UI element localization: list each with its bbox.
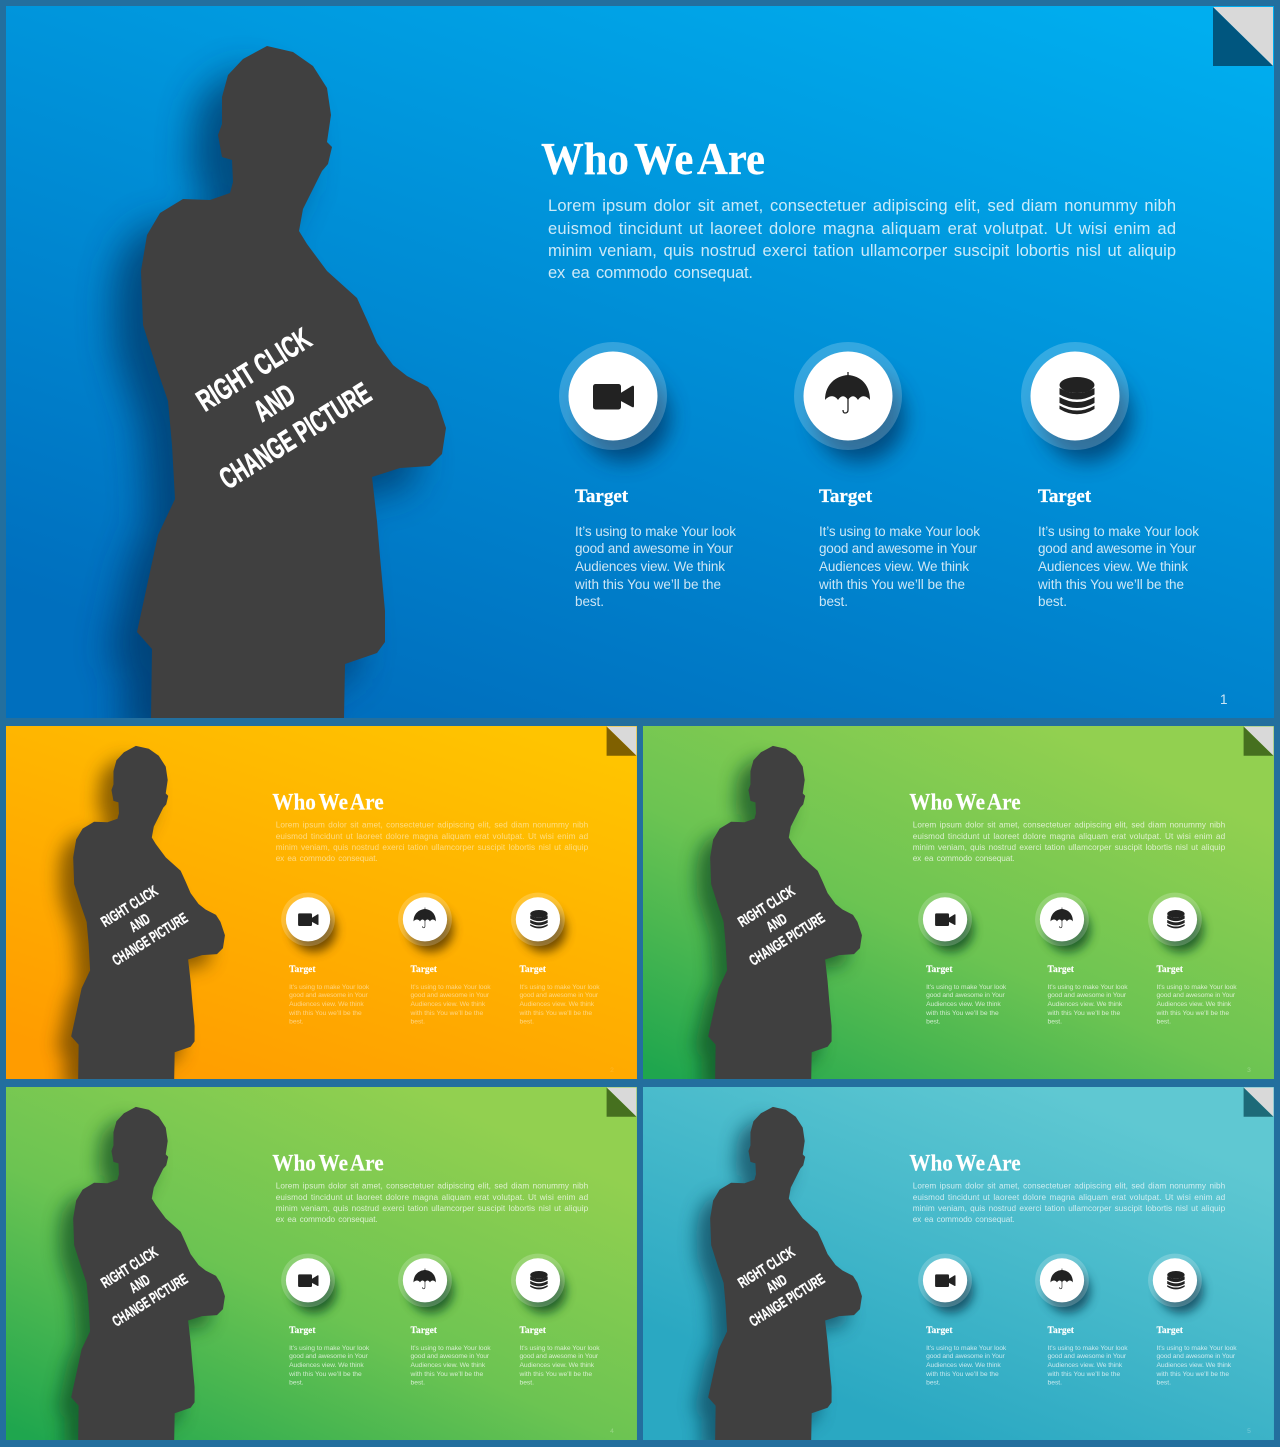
placeholder text: AND	[764, 911, 790, 936]
column 2 text: good and awesome in Your	[819, 541, 978, 556]
column 2 text: Target	[1048, 1326, 1075, 1336]
column 1 text: good and awesome in Your	[289, 992, 369, 999]
icon: umbrella	[1035, 893, 1090, 952]
column 2 text: good and awesome in Your	[411, 1353, 490, 1360]
column 1 text: best.	[926, 1379, 941, 1386]
column 1 text: Audiences view. We think	[575, 559, 725, 574]
intro paragraph	[276, 1182, 589, 1224]
placeholder text	[726, 1239, 828, 1330]
column 2 text: good and awesome in Your	[411, 992, 490, 999]
column 3 text: good and awesome in Your	[1157, 992, 1236, 999]
column 3 text: best.	[1157, 1018, 1171, 1025]
column 2 text: Target	[1048, 965, 1075, 975]
column 3 text: good and awesome in Your	[520, 1353, 599, 1360]
intro paragraph	[276, 821, 589, 863]
intro paragraph: Lorem ipsum dolor sit amet, consectetuer adipiscing elit, sed diam nonummy nibh	[913, 821, 1226, 830]
silhouette shadow	[694, 758, 848, 1091]
placeholder text: CHANGE PICTURE	[214, 377, 377, 496]
column 1 text: with this You we’ll be the	[288, 1010, 362, 1017]
slide 5: teal	[643, 1087, 1274, 1447]
title: Who We Are	[541, 133, 765, 184]
column 3 text	[1037, 486, 1199, 609]
icon: umbrella	[398, 1254, 453, 1313]
column 3 text: It’s using to make Your look	[1038, 524, 1199, 539]
column 1 text: best.	[289, 1379, 304, 1386]
icon: database	[1148, 893, 1203, 952]
icon: umbrella	[794, 342, 905, 462]
intro paragraph	[913, 821, 1226, 863]
slide 3: green	[643, 726, 1274, 1091]
intro paragraph: Lorem ipsum dolor sit amet, consectetuer adipiscing elit, sed diam nonummy nibh	[276, 1182, 589, 1191]
corner fold	[607, 1088, 636, 1117]
column 3 text	[519, 1326, 600, 1386]
column 3 text: Target	[1157, 965, 1184, 975]
column 2 text: best.	[411, 1379, 425, 1386]
column 1 text	[288, 1326, 370, 1386]
placeholder text	[172, 311, 377, 496]
column 2 text	[1047, 965, 1128, 1025]
page number: 2	[610, 1067, 614, 1074]
column 1 text: best.	[289, 1018, 304, 1025]
column 3 text: good and awesome in Your	[520, 992, 599, 999]
column 1 text: best.	[926, 1018, 941, 1025]
column 2 text: best.	[819, 594, 848, 609]
icon: umbrella	[1035, 1254, 1090, 1313]
silhouette figure	[708, 746, 862, 1079]
column 1 text	[288, 965, 370, 1025]
column 1 text: best.	[575, 594, 604, 609]
column 2 text	[818, 486, 980, 609]
column 3 text: It’s using to make Your look	[1157, 984, 1237, 991]
column 2 text: with this You we’ll be the	[818, 577, 965, 592]
column 1 text: Target	[926, 965, 953, 975]
slide 2: orange	[6, 726, 637, 1091]
column 3 text	[1156, 1326, 1237, 1386]
intro paragraph: Lorem ipsum dolor sit amet, consectetuer adipiscing elit, sed diam nonummy nibh	[913, 1182, 1226, 1191]
column 2 text: Target	[819, 486, 873, 507]
column 2 text: It’s using to make Your look	[1048, 984, 1128, 991]
intro paragraph: Lorem ipsum dolor sit amet, consectetuer adipiscing elit, sed diam nonummy nibh	[276, 821, 589, 830]
column 1 text: good and awesome in Your	[926, 992, 1006, 999]
column 1 text	[925, 965, 1007, 1025]
icon: database	[511, 893, 566, 952]
column 3 text	[1156, 965, 1237, 1025]
column 1 text: with this You we’ll be the	[288, 1371, 362, 1378]
column 3 text	[519, 965, 600, 1025]
column 2 text: Target	[411, 1326, 438, 1336]
column 3 text: good and awesome in Your	[1038, 541, 1196, 556]
page number: 3	[1247, 1067, 1251, 1074]
column 2 text: with this You we’ll be the	[1047, 1371, 1120, 1378]
icon: video camera	[918, 1254, 973, 1313]
silhouette shadow	[694, 1119, 848, 1447]
column 2 text: with this You we’ll be the	[1047, 1010, 1120, 1017]
column 2 text: It’s using to make Your look	[411, 1345, 491, 1352]
slide background	[643, 1087, 1274, 1440]
column 3 text: Target	[1038, 486, 1092, 507]
intro paragraph: minim veniam, quis nostrud exerci tation ullamcorper suscipit lobortis nisl ut aliquip	[548, 242, 1176, 260]
icon: video camera	[559, 342, 670, 462]
column 3 text: Target	[1157, 1326, 1184, 1336]
intro paragraph: ex ea commodo consequat.	[276, 1215, 378, 1224]
intro paragraph: ex ea commodo consequat.	[913, 854, 1015, 863]
column 3 text: best.	[520, 1379, 534, 1386]
column 2 text	[410, 965, 491, 1025]
icon: video camera	[281, 893, 336, 952]
column 3 text: Target	[520, 965, 547, 975]
placeholder text: AND	[127, 911, 153, 936]
title: Who We Are	[272, 1150, 384, 1175]
column 2 text: Audiences view. We think	[411, 1001, 486, 1008]
column 1 text: Target	[575, 486, 629, 507]
icon: video camera	[281, 1254, 336, 1313]
placeholder text	[726, 878, 828, 969]
page number: 1	[1220, 692, 1228, 707]
slide 1: blue	[6, 6, 1274, 743]
intro paragraph: Lorem ipsum dolor sit amet, consectetuer adipiscing elit, sed diam nonummy nibh	[548, 197, 1176, 215]
column 1 text: It’s using to make Your look	[289, 984, 370, 991]
column 2 text: Target	[411, 965, 438, 975]
icon: video camera	[918, 893, 973, 952]
icon: umbrella	[398, 893, 453, 952]
slide background	[6, 726, 637, 1079]
column 2 text: best.	[1048, 1018, 1062, 1025]
column 3 text: with this You we’ll be the	[519, 1010, 592, 1017]
column 2 text: good and awesome in Your	[1048, 1353, 1127, 1360]
placeholder text: RIGHT CLICK	[99, 1245, 161, 1292]
column 3 text: Audiences view. We think	[1157, 1362, 1232, 1369]
column 2 text	[1047, 1326, 1128, 1386]
intro paragraph: minim veniam, quis nostrud exerci tation ullamcorper suscipit lobortis nisl ut aliquip	[276, 1204, 589, 1213]
placeholder text: AND	[764, 1272, 790, 1297]
corner fold	[1244, 727, 1273, 756]
intro paragraph: euismod tincidunt ut laoreet dolore magna aliquam erat volutpat. Ut wisi enim ad	[913, 832, 1226, 841]
column 2 text: Audiences view. We think	[1048, 1362, 1123, 1369]
column 2 text: with this You we’ll be the	[410, 1010, 483, 1017]
column 3 text: Audiences view. We think	[520, 1362, 595, 1369]
column 2 text	[410, 1326, 491, 1386]
silhouette shadow	[57, 758, 211, 1091]
placeholder text: RIGHT CLICK	[99, 884, 161, 931]
placeholder text: AND	[248, 378, 301, 428]
placeholder text: CHANGE PICTURE	[747, 1272, 828, 1330]
column 3 text: with this You we’ll be the	[1156, 1371, 1229, 1378]
column 3 text: good and awesome in Your	[1157, 1353, 1236, 1360]
icon: database	[511, 1254, 566, 1313]
column 2 text: best.	[1048, 1379, 1062, 1386]
intro paragraph	[913, 1182, 1226, 1224]
intro paragraph: euismod tincidunt ut laoreet dolore magna aliquam erat volutpat. Ut wisi enim ad	[276, 832, 589, 841]
column 3 text: Target	[520, 1326, 547, 1336]
column 1 text: It’s using to make Your look	[575, 524, 736, 539]
column 3 text: Audiences view. We think	[1157, 1001, 1232, 1008]
placeholder text: CHANGE PICTURE	[110, 911, 191, 969]
column 1 text	[925, 1326, 1007, 1386]
column 1 text: with this You we’ll be the	[925, 1371, 999, 1378]
column 2 text: best.	[411, 1018, 425, 1025]
column 2 text: Audiences view. We think	[819, 559, 969, 574]
intro paragraph: ex ea commodo consequat.	[276, 854, 378, 863]
silhouette shadow	[57, 1119, 211, 1447]
column 2 text: It’s using to make Your look	[819, 524, 980, 539]
silhouette figure	[708, 1107, 862, 1440]
column 2 text: It’s using to make Your look	[411, 984, 491, 991]
column 2 text: Audiences view. We think	[411, 1362, 486, 1369]
slide background	[643, 726, 1274, 1079]
slide 4: green	[6, 1087, 637, 1447]
title: Who We Are	[272, 789, 384, 814]
column 1 text: good and awesome in Your	[575, 541, 734, 556]
placeholder text: CHANGE PICTURE	[110, 1272, 191, 1330]
column 3 text: Audiences view. We think	[1038, 559, 1188, 574]
column 1 text	[574, 486, 736, 609]
column 1 text: with this You we’ll be the	[925, 1010, 999, 1017]
column 3 text: best.	[1038, 594, 1067, 609]
slide background	[6, 6, 1274, 718]
page number: 4	[610, 1428, 614, 1435]
column 2 text: good and awesome in Your	[1048, 992, 1127, 999]
column 1 text: Audiences view. We think	[926, 1001, 1001, 1008]
column 3 text: with this You we’ll be the	[1156, 1010, 1229, 1017]
column 1 text: Target	[289, 965, 316, 975]
column 1 text: Target	[926, 1326, 953, 1336]
column 3 text: with this You we’ll be the	[519, 1371, 592, 1378]
silhouette figure	[71, 1107, 225, 1440]
title: Who We Are	[909, 789, 1021, 814]
column 1 text: good and awesome in Your	[926, 1353, 1006, 1360]
silhouette figure	[71, 746, 225, 1079]
intro paragraph: minim veniam, quis nostrud exerci tation ullamcorper suscipit lobortis nisl ut aliquip	[913, 1204, 1226, 1213]
column 3 text: It’s using to make Your look	[520, 984, 600, 991]
intro paragraph: euismod tincidunt ut laoreet dolore magna aliquam erat volutpat. Ut wisi enim ad	[913, 1193, 1226, 1202]
corner fold	[1244, 1088, 1273, 1117]
column 1 text: Audiences view. We think	[926, 1362, 1001, 1369]
intro paragraph: minim veniam, quis nostrud exerci tation ullamcorper suscipit lobortis nisl ut aliquip	[913, 843, 1226, 852]
silhouette figure	[137, 46, 446, 718]
intro paragraph: euismod tincidunt ut laoreet dolore magna aliquam erat volutpat. Ut wisi enim ad	[548, 220, 1176, 238]
column 1 text: with this You we’ll be the	[574, 577, 721, 592]
corner fold	[1213, 7, 1273, 66]
column 1 text: It’s using to make Your look	[926, 1345, 1007, 1352]
column 3 text: It’s using to make Your look	[1157, 1345, 1237, 1352]
intro paragraph	[548, 197, 1176, 282]
column 2 text: with this You we’ll be the	[410, 1371, 483, 1378]
intro paragraph: ex ea commodo consequat.	[548, 264, 753, 282]
column 1 text: It’s using to make Your look	[289, 1345, 370, 1352]
column 2 text: It’s using to make Your look	[1048, 1345, 1128, 1352]
placeholder text: RIGHT CLICK	[736, 884, 798, 931]
corner fold	[607, 727, 636, 756]
slide background	[6, 1087, 637, 1440]
placeholder text	[89, 878, 191, 969]
placeholder text: RIGHT CLICK	[736, 1245, 798, 1292]
placeholder text	[89, 1239, 191, 1330]
column 1 text: Target	[289, 1326, 316, 1336]
column 1 text: Audiences view. We think	[289, 1362, 364, 1369]
column 3 text: best.	[520, 1018, 534, 1025]
icon: database	[1021, 342, 1132, 462]
column 3 text: Audiences view. We think	[520, 1001, 595, 1008]
placeholder text: AND	[127, 1272, 153, 1297]
column 1 text: Audiences view. We think	[289, 1001, 364, 1008]
title: Who We Are	[909, 1150, 1021, 1175]
page number: 5	[1247, 1428, 1251, 1435]
intro paragraph: ex ea commodo consequat.	[913, 1215, 1015, 1224]
column 1 text: It’s using to make Your look	[926, 984, 1007, 991]
column 3 text: best.	[1157, 1379, 1171, 1386]
intro paragraph: minim veniam, quis nostrud exerci tation ullamcorper suscipit lobortis nisl ut aliquip	[276, 843, 589, 852]
intro paragraph: euismod tincidunt ut laoreet dolore magna aliquam erat volutpat. Ut wisi enim ad	[276, 1193, 589, 1202]
icon: database	[1148, 1254, 1203, 1313]
silhouette shadow	[109, 71, 418, 743]
column 2 text: Audiences view. We think	[1048, 1001, 1123, 1008]
placeholder text: CHANGE PICTURE	[747, 911, 828, 969]
column 3 text: with this You we’ll be the	[1037, 577, 1184, 592]
column 3 text: It’s using to make Your look	[520, 1345, 600, 1352]
column 1 text: good and awesome in Your	[289, 1353, 369, 1360]
placeholder text: RIGHT CLICK	[191, 322, 317, 418]
